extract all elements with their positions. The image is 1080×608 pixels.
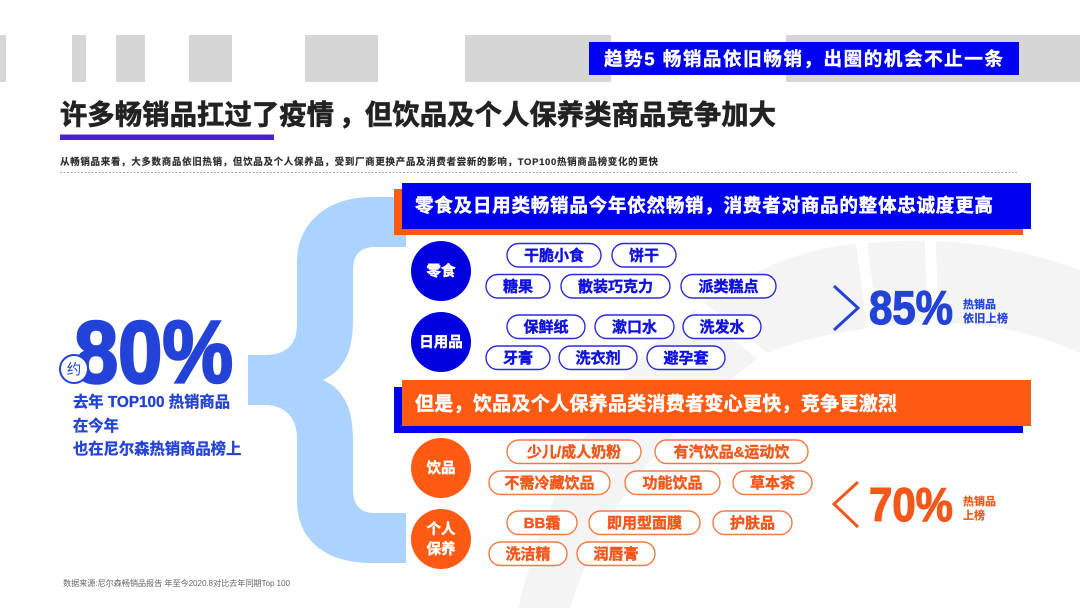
stat: 85 percent: 85%: [869, 281, 953, 334]
stat: 70 percent: [834, 478, 996, 531]
category: snacks: 零食: [426, 262, 456, 280]
banner: drinks and personal care: 但是，饮品及个人保养品类消费者变心更快，竞争更激烈: [415, 392, 897, 415]
title: ，: [339, 99, 366, 130]
category: snacks: 饼干: [629, 246, 659, 264]
source note: 数据来源:尼尔森畅销品报告 年至今2020.8对比去年同期Top 100: [63, 578, 290, 588]
stat description: 在今年: [73, 417, 119, 435]
category: personal care: 个人: [426, 521, 456, 538]
stat description: [73, 393, 241, 458]
category: personal care: 润唇膏: [593, 545, 639, 563]
title: 但饮品及个人保养类商品竞争加大: [365, 99, 776, 130]
category: personal care: [411, 509, 792, 569]
category: personal care: 护肤品: [730, 515, 775, 532]
stat description: 也在尼尔森热销商品榜上: [73, 440, 241, 458]
title: 许多畅销品扛过了疫情: [60, 99, 334, 130]
title underline: [60, 134, 274, 140]
stat: 70 percent: 70%: [869, 478, 953, 531]
category: daily goods: 牙膏: [503, 349, 533, 367]
trend badge: [589, 42, 1019, 75]
category: personal care: 即用型面膜: [607, 514, 682, 532]
banner: snacks and daily goods: [394, 183, 1031, 235]
category: personal care: BB霜: [524, 515, 560, 532]
brace: [248, 197, 406, 563]
category: drinks: 少儿/成人奶粉: [527, 443, 621, 461]
category: snacks: [411, 241, 776, 301]
category: daily goods: 保鲜纸: [523, 318, 569, 336]
category: drinks: 草本茶: [750, 474, 795, 492]
stat: 70 percent: 热销品: [963, 494, 996, 508]
title: [60, 99, 776, 130]
category: drinks: 有汽饮品&运动饮: [674, 443, 789, 461]
stat: 85 percent: 热销品: [963, 297, 996, 311]
category: snacks: 糖果: [503, 278, 533, 296]
subtitle: 从畅销品来看，大多数商品依旧热销，但饮品及个人保养品，受到厂商更换产品及消费者尝新的影响，TOP100热销商品榜变化的更快: [60, 156, 658, 168]
stat: 70 percent: 上榜: [963, 508, 985, 522]
background ring decoration: [518, 232, 1080, 608]
banner: drinks and personal care: [394, 380, 1031, 433]
category: snacks: 派类糕点: [698, 278, 759, 296]
category: drinks: [411, 438, 812, 498]
category: drinks: 功能饮品: [642, 474, 703, 492]
category: snacks: 散装巧克力: [578, 278, 653, 296]
banner: snacks and daily goods: 零食及日用类畅销品今年依然畅销，消费者对商品的整体忠诚度更高: [415, 195, 993, 216]
stat: 80 percent: 约: [67, 362, 81, 378]
category: snacks: 干脆小食: [524, 246, 584, 264]
category: daily goods: [411, 312, 761, 372]
category: personal care: 洗洁精: [505, 545, 551, 563]
stat: 80 percent: 80%: [74, 302, 233, 402]
stat description: 去年 TOP100 热销商品: [73, 393, 230, 411]
trend badge: 趋势5 畅销品依旧畅销，出圈的机会不止一条: [604, 48, 1003, 70]
category: daily goods: 漱口水: [612, 319, 657, 336]
category: daily goods: 洗衣剂: [575, 349, 621, 367]
category: daily goods: 洗发水: [699, 318, 745, 336]
category: drinks: 饮品: [426, 460, 456, 477]
stat: 85 percent: 依旧上榜: [963, 311, 1008, 325]
category: personal care: 保养: [426, 540, 456, 558]
stat: 85 percent: [834, 281, 1008, 334]
category: daily goods: 日用品: [419, 335, 463, 351]
grey header bars: [0, 35, 1080, 82]
category: drinks: 不需冷藏饮品: [504, 474, 595, 492]
category: daily goods: 避孕套: [663, 350, 709, 367]
